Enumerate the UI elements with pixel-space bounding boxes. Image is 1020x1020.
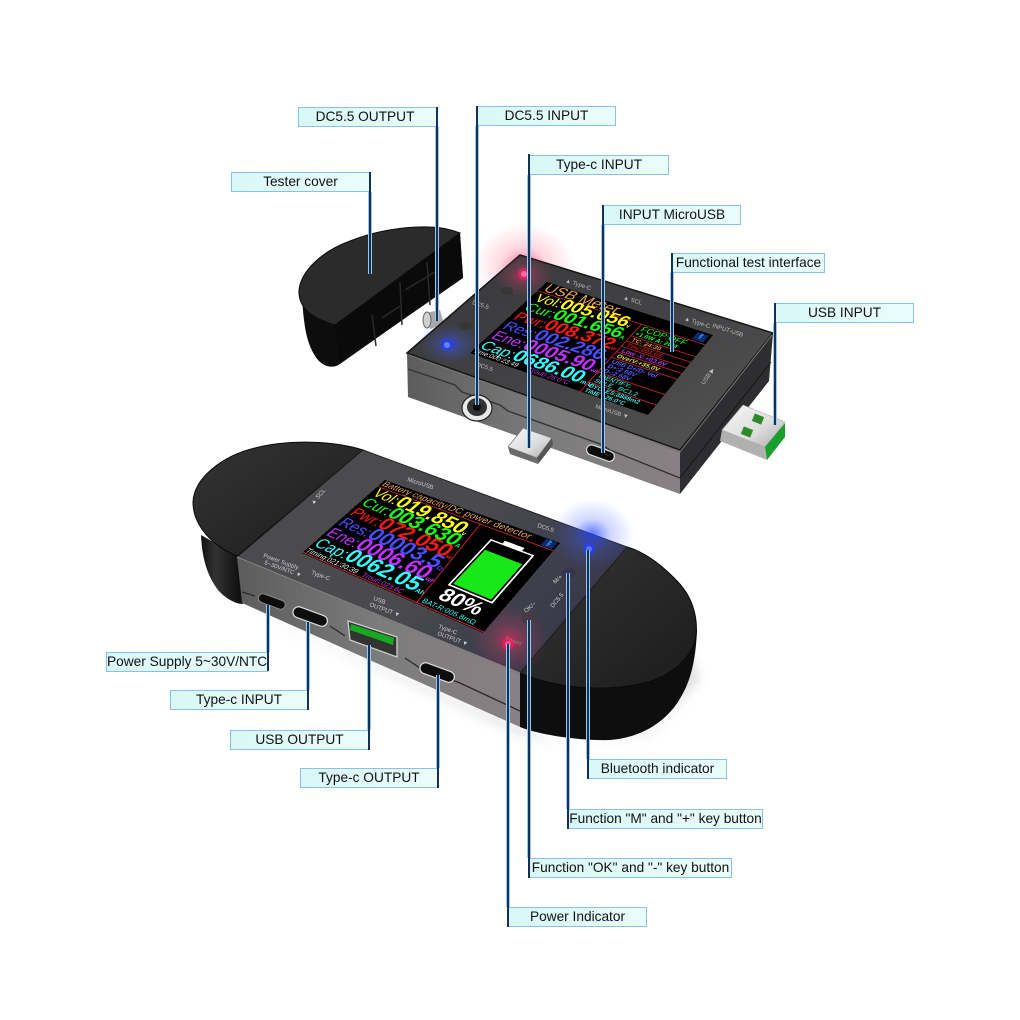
readout rows: Cur:001.656A [521,300,629,341]
label: Functional test interface: Functional test interface [676,255,821,270]
bottom device small printed labels: MicroUSB [406,477,434,491]
battery percentage: 80% [433,584,490,619]
function test panel: FCOP:OFF [639,325,689,347]
bottom device screen [302,480,560,633]
function test panel: D+:2.68V [606,363,639,378]
label: USB OUTPUT [230,730,369,750]
bottom device small printed labels: Power [504,636,522,648]
readout rows: Vol:005.056v [531,292,635,330]
label: DC5.5 OUTPUT [298,107,437,127]
top Type-C plug [508,428,553,464]
function test panel: OverV:+35.0V [615,353,662,373]
label: Type-c INPUT top [529,155,669,175]
bottom device small printed labels: 5~30V/NTC ▼ [263,560,302,579]
vertical divider [416,524,481,602]
function test panel: Tmr:001.0S [625,342,665,359]
top device small printed labels: MicroUSB ▼ [594,404,629,421]
vertical divider [580,324,642,392]
horizontal divider [377,486,554,551]
label: DC5.5 INPUT: DC5.5 INPUT [505,108,588,123]
bottom device small printed labels: ▲ SCL [310,488,328,506]
label: Bluetooth indicator [588,759,727,779]
label: Tester cover [231,172,370,192]
bottom device small printed labels: OK/− [523,601,538,615]
label: Bluetooth indicator: Bluetooth indicator [601,761,714,776]
function test panel: Low -V:+03.6V [620,347,669,368]
bottom device small printed labels: M/+ [552,574,564,586]
readout rows: Ene:0006.60wh [322,525,439,585]
heading: USB Meter: USB Meter [540,282,625,317]
readout rows: T(out):023.6C [360,571,407,595]
bottom divider [302,552,484,633]
top micro USB port [585,444,616,463]
bottom device small printed labels: DC5.5 [550,592,566,609]
label: USB INPUT: USB INPUT [808,305,881,320]
top device small printed labels: DC5.5 [471,300,490,311]
bottom device centre body [237,450,634,727]
label: Tester cover: Tester cover [263,174,338,189]
bluetooth badge [692,332,709,342]
top device small printed labels: ▲ Type-C [683,316,711,330]
label: USB OUTPUT: USB OUTPUT [255,732,344,747]
bottom device ports [257,592,456,684]
readout rows: Res:00003.5Ω [334,515,450,572]
top device small printed labels: INPUT-USB [711,323,744,339]
readout rows: Time:000:23:49 [471,347,521,368]
label: Function M and + key button: Function "M" and "+" key button [569,811,762,826]
readout rows: Timing:021:30:39 [304,547,361,575]
readout rows: Cap:0062.05Ah [310,535,429,597]
bluetooth badge [540,539,557,549]
function test panel: USB D+/D- Vol [610,358,660,379]
USB input plug [720,405,785,460]
readout rows: Cur:003.630A [358,495,468,550]
label: Power Indicator: Power Indicator [530,909,625,924]
top divider [537,290,705,345]
top device indicators and buttons [441,268,530,351]
label: Type-c INPUT bottom [170,690,308,710]
top device small printed labels: ▲ SCL [622,295,643,307]
tester cover [299,227,463,367]
top device small printed labels: ▲ Type-C [564,278,592,292]
readout rows [471,292,635,389]
readout rows [304,486,474,597]
bluetooth badge: ᛒ [696,333,706,340]
label: INPUT MicroUSB [603,205,741,225]
label: Power Indicator [508,907,647,927]
top device screen [470,282,713,415]
function test panel [582,325,696,407]
function test panel: CYCLES:8888m2 [587,382,642,405]
top device small printed labels [471,278,744,421]
battery gauge [448,539,534,604]
battery resistance: BAT-R:005.8mΩ [420,597,479,626]
bottom device small printed labels: OUTPUT ▼ [368,602,401,619]
bottom device small printed labels [262,477,566,648]
label: Power Supply: Power Supply 5~30V/NTC [107,654,267,669]
bottom device small printed labels: Type-C [310,570,331,583]
bottom device small printed labels: DC5.5 [536,523,555,534]
bottom device small printed labels: OUTPUT ▼ [436,631,469,648]
bottom device soft shadow [245,610,700,745]
readout rows: T(out):26:0°C [525,366,572,386]
readout rows: Pwr:072.050w [346,505,459,561]
label: DC5.5 INPUT [477,106,616,126]
heading: battery capacity: Battery capacity/DC power detector [379,480,534,541]
label: Type-c OUTPUT [300,768,438,788]
DC5.5 output plug [423,310,444,329]
function test panel: +1.0W A: 20M [633,331,679,350]
label: Type-c OUTPUT: Type-c OUTPUT [318,770,420,785]
bluetooth badge: ᛒ [544,539,555,548]
label: Type-c INPUT bottom: Type-c INPUT [196,692,282,707]
bottom device small printed labels: Power Supply [262,553,299,572]
top device small printed labels: USB ▶ [701,367,717,386]
label: INPUT MicroUSB: INPUT MicroUSB [619,207,725,222]
function test panel: TC: 24:30 [630,337,663,352]
readout rows: Vol:019.850v [369,486,474,538]
bottom device small printed labels: USB [372,596,386,606]
bottom device small printed labels: Type-C [437,624,458,637]
label: Type-c INPUT top: Type-c INPUT [556,157,642,172]
label: DC5.5 OUTPUT: DC5.5 OUTPUT [316,109,414,124]
top device body [407,253,773,494]
bottom device right cap [520,547,697,740]
bottom device indicators and buttons [502,543,595,650]
label: USB INPUT [775,303,914,323]
DC5.5 input jack [462,395,492,421]
label: Function OK and - key button: Function "OK" and "-" key button [532,860,729,875]
readout rows: Res:002.286Ω [499,319,611,363]
function test panel: IDENTIFY: [597,373,634,390]
readout rows: Ene:0005.90wh [488,328,602,375]
top device small printed labels: DC5.5 [475,362,494,373]
function test panel: SDLE BC1.2 [592,377,640,398]
function test panel: D-:2.68V [602,367,633,382]
readout rows: Cap:0686.00mAh [476,338,597,389]
bottom device left cap [193,442,363,604]
readout rows: Pwr:008.372w [510,309,621,352]
function test panel: TIME : 26:0°C [582,387,627,407]
top device glow [417,223,574,369]
